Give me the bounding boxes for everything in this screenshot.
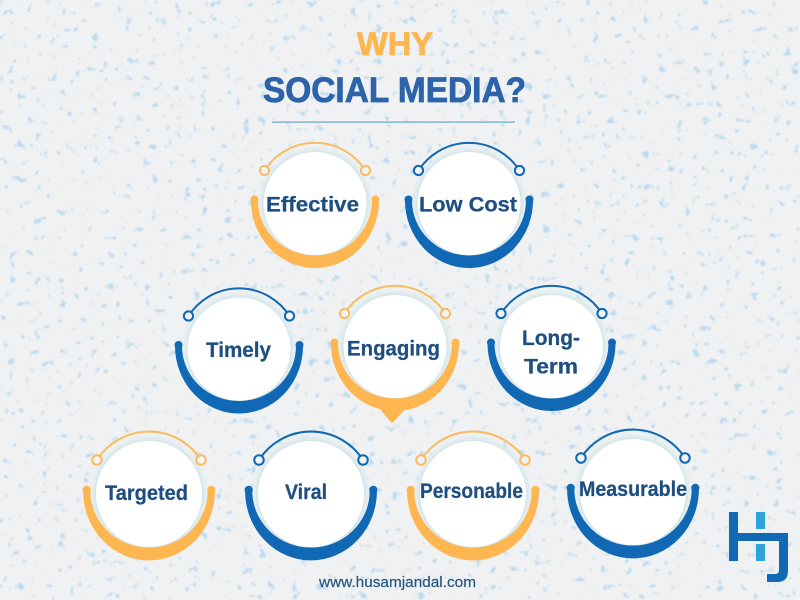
footer website: www.husamjandal.com xyxy=(318,575,476,591)
badge: Personable xyxy=(407,432,539,558)
badge: Low Cost xyxy=(404,143,534,266)
badge: Targeted xyxy=(83,432,215,558)
heading: why: WHY xyxy=(357,26,433,62)
badge: Long-Term: Term xyxy=(524,356,578,378)
badge: Effective: Effective xyxy=(266,194,359,216)
badge: Low Cost: Low Cost xyxy=(419,194,517,216)
badge: Effective xyxy=(250,143,380,266)
badge: Measurable xyxy=(567,430,699,556)
badge: Engaging with pointer: Engaging xyxy=(347,338,440,360)
badge: Viral xyxy=(245,432,377,558)
badge: Timely: Timely xyxy=(206,339,271,362)
logo: HJ xyxy=(729,512,788,582)
badge: Viral: Viral xyxy=(285,481,327,504)
title xyxy=(263,26,526,110)
badge: Timely xyxy=(174,288,304,412)
badge: Targeted: Targeted xyxy=(105,482,188,505)
badge: Engaging with pointer xyxy=(330,286,460,420)
title underline xyxy=(272,122,515,123)
heading: social media: SOCIAL MEDIA? xyxy=(263,71,526,110)
badge: Measurable: Measurable xyxy=(579,478,687,501)
badge: Personable: Personable xyxy=(420,480,523,503)
badge: Long-Term: Long- xyxy=(522,327,580,350)
badge: Long-Term xyxy=(487,286,616,409)
